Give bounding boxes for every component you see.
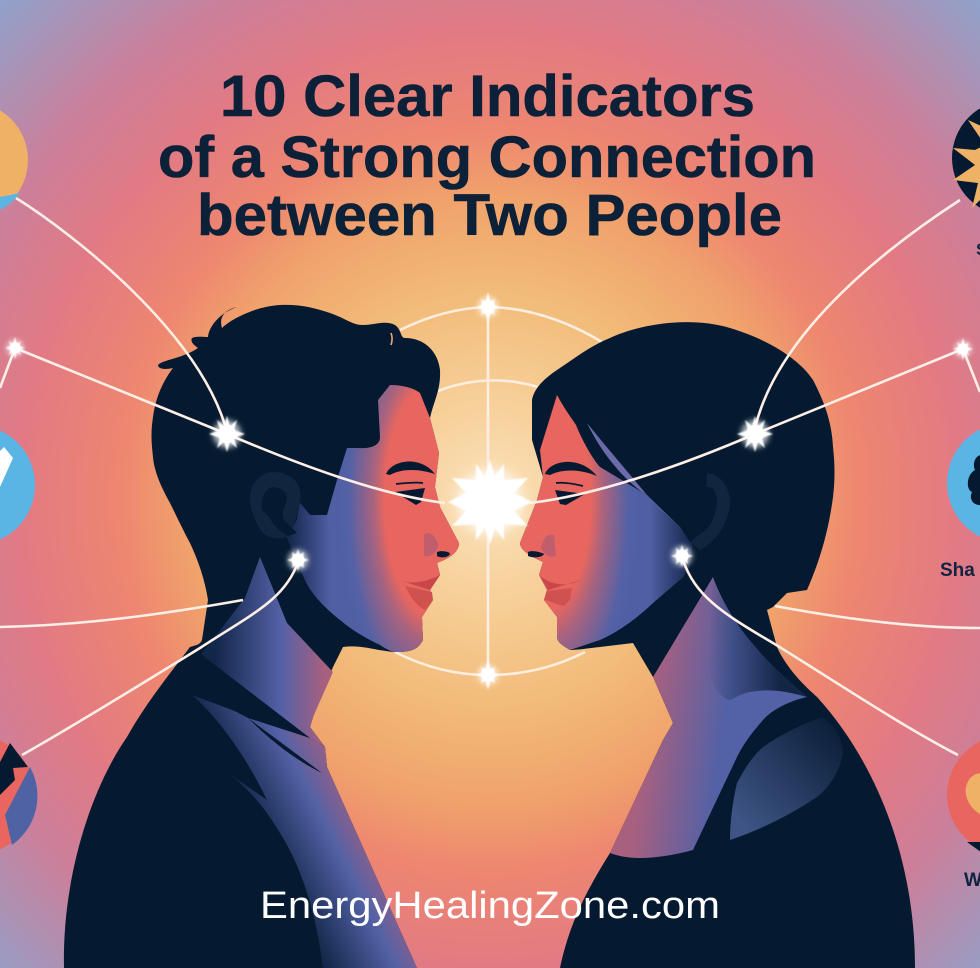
footer website: EnergyHealingZone.com <box>260 885 720 927</box>
star: woman neck <box>671 545 693 567</box>
figure: woman in profile <box>520 322 915 968</box>
star: right node <box>953 338 973 360</box>
star: woman crown <box>737 416 773 452</box>
woman neck and chest <box>610 577 807 858</box>
icon: left bottom figure circle <box>0 735 37 855</box>
man silhouette <box>64 305 459 968</box>
star: left node <box>5 337 25 359</box>
man ear <box>250 472 300 538</box>
man shirt <box>192 695 417 968</box>
label: Sha: Sha <box>940 560 975 581</box>
man neck <box>200 557 333 747</box>
woman shoulder highlight <box>730 717 843 840</box>
constellation arcs behind the heads <box>395 307 602 675</box>
icon: left middle blue circle <box>0 425 35 545</box>
central starburst <box>448 460 532 544</box>
woman silhouette <box>520 322 915 968</box>
title: between Two People <box>197 183 782 248</box>
man collar <box>185 652 322 773</box>
title: of a Strong Connection <box>158 125 816 190</box>
man eyebrow, eye, nose and mouth <box>386 462 450 610</box>
star: bottom of arc <box>477 660 499 690</box>
figure: man in profile <box>64 305 459 968</box>
star: top of arc <box>477 292 499 322</box>
icon: left top sunset circle <box>0 102 28 218</box>
icon: right middle blue circle <box>947 423 980 543</box>
icon: right bottom heart circle <box>947 735 980 855</box>
connection lines over the figures <box>0 198 980 755</box>
woman face <box>520 395 692 650</box>
woman hair strand <box>587 423 647 495</box>
man face <box>287 385 459 652</box>
title: 10 Clear Indicators <box>220 64 755 129</box>
woman eyebrow, eye, nose and mouth <box>528 462 597 606</box>
star: man neck <box>287 549 309 571</box>
icon: right top sunburst circle <box>952 100 980 216</box>
star: man crown <box>209 416 245 452</box>
woman neck shading <box>709 577 807 700</box>
title <box>158 64 816 248</box>
man hair curl highlight <box>391 333 392 345</box>
woman ear <box>682 473 730 550</box>
